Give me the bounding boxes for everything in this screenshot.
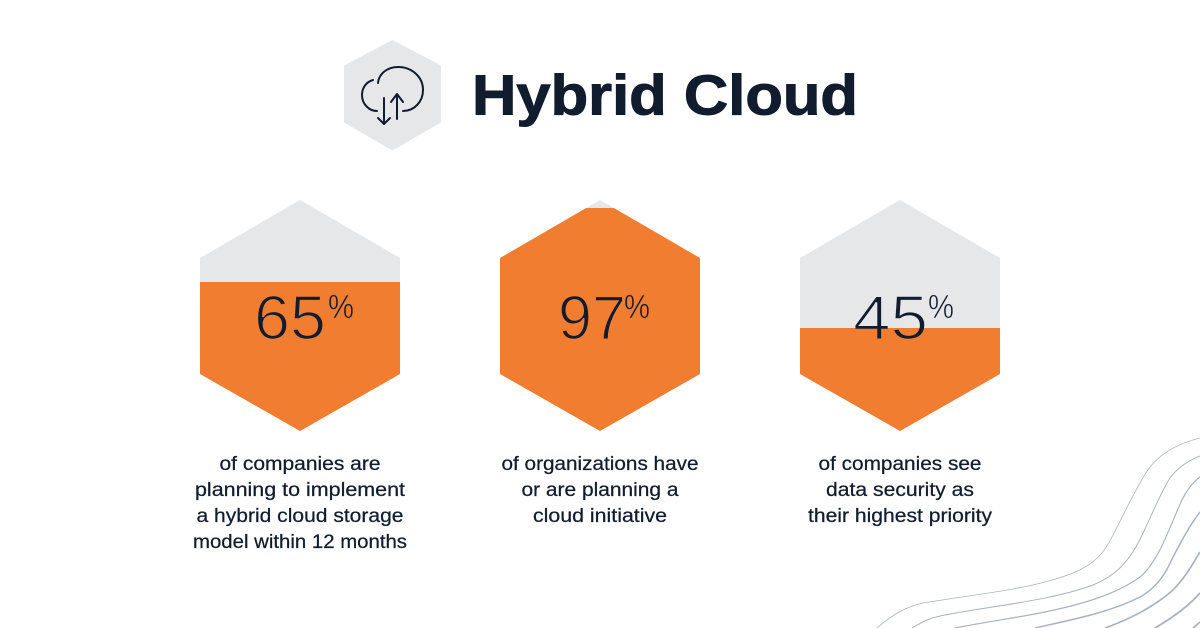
description (502, 453, 698, 527)
header icon: hexagon with cloud (344, 40, 441, 150)
stat card: 97%: % (624, 288, 650, 325)
description: a hybrid cloud storage (196, 505, 404, 527)
description (808, 453, 992, 527)
stat card: 65%: 65 (254, 284, 326, 353)
stat card: 45%: 45 (853, 284, 928, 353)
description: planning to implement (195, 479, 406, 501)
stat card: 65%: % (328, 288, 354, 325)
stat card: 45%: % (928, 288, 954, 325)
description: of companies see (818, 453, 982, 475)
title: Hybrid Cloud (472, 64, 858, 128)
description: of organizations have (502, 453, 698, 475)
description (193, 453, 407, 553)
description: of companies are (220, 453, 380, 475)
description: cloud initiative (533, 505, 667, 527)
stat card: 97% (500, 200, 700, 527)
decorative wave lines (877, 438, 1200, 628)
description: model within 12 months (193, 531, 407, 553)
description: or are planning a (522, 479, 679, 501)
stat card: 45% (800, 200, 1000, 527)
description: their highest priority (808, 505, 992, 527)
description: data security as (826, 479, 974, 501)
stat card: 65% (193, 200, 407, 553)
stat card: 97%: 97 (558, 284, 626, 353)
